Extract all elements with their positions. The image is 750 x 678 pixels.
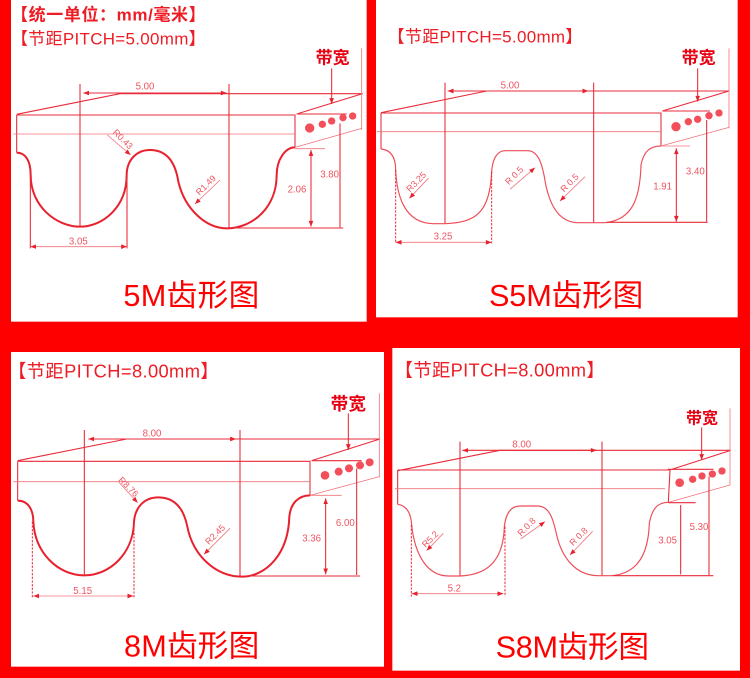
heading: pitch: 【节距PITCH=8.00mm】 bbox=[395, 360, 605, 381]
dimension: 5.30 bbox=[613, 477, 713, 576]
dimension: pitch 5.00: 5.00 bbox=[136, 82, 154, 93]
dimension: 5.15 bbox=[32, 522, 134, 598]
dimension: pitch 8.00: 8.00 bbox=[512, 439, 531, 450]
label: belt width with arrow: 带宽 bbox=[686, 408, 718, 427]
dimension: 3.05: 3.05 bbox=[69, 236, 88, 247]
radius: R 0.5 right: R 0.5 bbox=[558, 172, 581, 194]
radius: R0.43: R0.43 bbox=[111, 127, 135, 151]
dimension: 3.05 bbox=[658, 503, 696, 574]
label: belt width with arrow: 带宽 bbox=[331, 393, 366, 414]
radius: R1.49: R1.49 bbox=[194, 173, 218, 197]
dimension: 2.06 bbox=[288, 149, 325, 227]
belt body outline bbox=[13, 48, 363, 228]
dimension: 3.40 bbox=[607, 120, 708, 222]
label: belt width with arrow bbox=[316, 47, 350, 104]
label: belt width with arrow bbox=[682, 47, 716, 102]
panel title: S8M齿形图 bbox=[496, 630, 649, 664]
dimension: 2.06: 2.06 bbox=[288, 185, 306, 196]
panel title: 5M齿形图 bbox=[123, 279, 259, 313]
belt dots bbox=[671, 109, 723, 131]
dimension: 6.00 bbox=[248, 468, 360, 576]
label: belt width with arrow: 带宽 bbox=[682, 47, 716, 67]
panel: 5M tooth profile bbox=[11, 0, 367, 322]
dimension: 3.25 bbox=[396, 170, 492, 243]
dimension: 3.80 bbox=[230, 123, 343, 228]
heading: pitch: 【节距PITCH=8.00mm】 bbox=[8, 361, 219, 382]
radius: R2.45 bbox=[203, 523, 230, 554]
belt body outline bbox=[13, 393, 380, 577]
radius: R3.25: R3.25 bbox=[404, 170, 428, 194]
belt body outline bbox=[377, 48, 729, 223]
belt dots bbox=[321, 458, 374, 480]
radius: R5.2: R5.2 bbox=[420, 529, 440, 549]
dimension: 3.05 bbox=[30, 175, 127, 248]
dimension: pitch 5.00: 5.00 bbox=[501, 80, 519, 91]
radius: R 0.5 middle: R 0.5 bbox=[503, 164, 525, 187]
belt dots bbox=[305, 112, 356, 133]
dimension: 5.2 bbox=[411, 525, 505, 597]
dimension: 3.05: 3.05 bbox=[658, 536, 677, 547]
panel: S5M tooth profile bbox=[376, 0, 738, 317]
belt body outline bbox=[395, 408, 731, 576]
dimension: 5.15: 5.15 bbox=[73, 586, 92, 597]
panel title: 8M齿形图 bbox=[124, 630, 259, 664]
heading: unit note: 【统一单位：mm/毫米】 bbox=[11, 5, 206, 25]
panel: S8M tooth profile bbox=[392, 348, 740, 671]
dimension: 1.91 bbox=[653, 146, 690, 222]
radius: R 0.5 middle bbox=[503, 164, 535, 189]
radius: R 0.8 right: R 0.8 bbox=[567, 525, 590, 548]
dimension: 3.40: 3.40 bbox=[686, 166, 705, 177]
heading: pitch: 【节距PITCH=5.00mm】 bbox=[11, 29, 206, 48]
label: belt width with arrow: 带宽 bbox=[316, 47, 350, 67]
heading: pitch: 【节距PITCH=5.00mm】 bbox=[388, 27, 582, 46]
dimension: 3.36: 3.36 bbox=[302, 533, 321, 544]
label: belt width with arrow bbox=[686, 408, 718, 460]
dimension: 3.36 bbox=[302, 495, 342, 574]
dimension: pitch 8.00: 8.00 bbox=[143, 428, 161, 439]
dimension: 6.00: 6.00 bbox=[336, 518, 355, 529]
tooth profile curve bbox=[398, 502, 668, 576]
radius: R8.76: R8.76 bbox=[116, 475, 140, 499]
tooth profile curve bbox=[17, 147, 295, 228]
panel title: S5M齿形图 bbox=[489, 279, 643, 313]
radius: R.0.8 middle: R.0.8 bbox=[515, 516, 538, 538]
tooth profile curve bbox=[381, 146, 661, 224]
radius: R2.45: R2.45 bbox=[203, 523, 227, 547]
dimension: 5.30: 5.30 bbox=[690, 522, 708, 533]
dimension: 3.25: 3.25 bbox=[434, 232, 452, 243]
radius: R 0.8 right bbox=[567, 525, 593, 555]
dimension: 3.80: 3.80 bbox=[320, 170, 339, 181]
label: belt width with arrow bbox=[331, 393, 366, 450]
radius: R 0.5 right bbox=[558, 172, 585, 201]
dimension: pitch 8.00 bbox=[462, 439, 597, 450]
belt dots bbox=[675, 467, 726, 487]
dimension: 5.2: 5.2 bbox=[448, 584, 461, 595]
dimension: 1.91: 1.91 bbox=[653, 182, 672, 193]
panel: 8M tooth profile bbox=[8, 352, 384, 667]
tooth profile curve bbox=[18, 495, 310, 577]
